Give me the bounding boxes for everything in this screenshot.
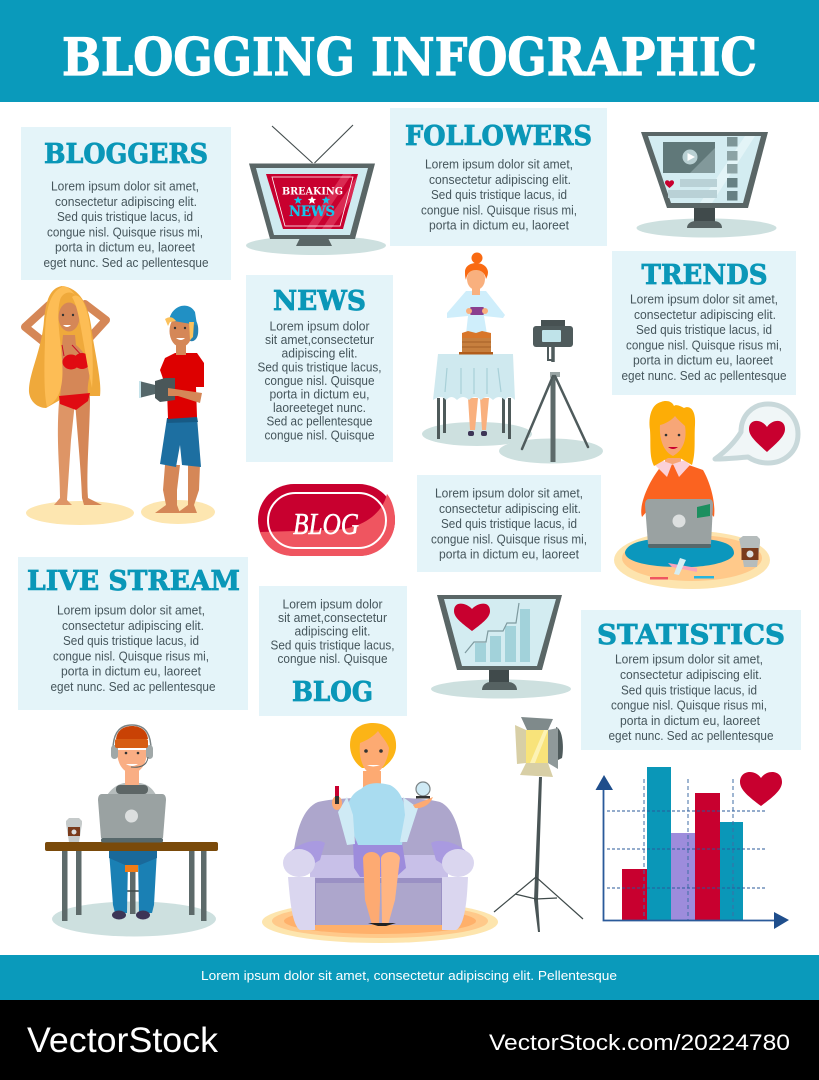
text block: live stream: porta in dictum eu, laoreet	[61, 665, 202, 679]
text block: bloggers: Sed quis tristique lacus, id	[57, 210, 193, 224]
text block: news: Lorem ipsum dolor	[270, 320, 370, 334]
text block: news	[258, 320, 382, 442]
text block: bloggers: eget nunc. Sed ac pellentesque	[44, 256, 209, 270]
icon: video monitor	[636, 132, 776, 238]
heading: blog: BLOG	[292, 676, 373, 708]
panel: news	[246, 275, 393, 462]
text block: trends: Sed quis tristique lacus, id	[636, 323, 772, 337]
heading: followers: FOLLOWERS	[405, 120, 592, 152]
text block: statistics: consectetur adipiscing elit.	[620, 668, 762, 682]
text block: statistics: porta in dictum eu, laoreet	[620, 714, 761, 728]
text block: news: sit amet,consectetur	[265, 333, 374, 347]
text block: blog: Sed quis tristique lacus,	[270, 638, 394, 652]
text block: news: congue nisl. Quisque	[264, 374, 375, 388]
heading: news: NEWS	[273, 285, 366, 317]
text block: news: congue nisl. Quisque	[264, 428, 375, 442]
panel: centre text: Lorem ipsum dolor sit amet,	[435, 486, 583, 500]
footer bar	[0, 955, 819, 1000]
illustration: tripod camera	[499, 320, 603, 464]
footer bar: Lorem ipsum dolor sit amet, consectetur adipiscing elit. Pellentesque	[201, 968, 617, 983]
text block: trends: Lorem ipsum dolor sit amet,	[630, 292, 778, 306]
watermark bar	[0, 1000, 819, 1080]
text block: blog	[270, 598, 394, 666]
title: BLOGGING INFOGRAPHIC	[62, 28, 757, 88]
icon: breaking news tv: BREAKING	[282, 186, 343, 198]
panel: statistics	[581, 610, 801, 750]
panel: centre text: congue nisl. Quisque risus mi,	[431, 532, 587, 546]
text block: live stream: eget nunc. Sed ac pellentesque	[50, 680, 216, 694]
text block: statistics: eget nunc. Sed ac pellentesque	[608, 729, 774, 743]
illustration: studio light	[494, 717, 583, 932]
text block: blog: congue nisl. Quisque	[278, 652, 388, 666]
text block: trends: consectetur adipiscing elit.	[634, 308, 776, 322]
text block: bloggers: congue nisl. Quisque risus mi,	[47, 225, 203, 239]
text block: followers: Sed quis tristique lacus, id	[431, 188, 567, 202]
text block: trends: porta in dictum eu, laoreet	[633, 354, 774, 368]
text block: news: Sed quis tristique lacus,	[258, 360, 382, 374]
panel: centre text: consectetur adipiscing elit.	[439, 502, 581, 516]
panel: followers	[390, 108, 607, 246]
illustration: bikini blogger	[25, 286, 134, 525]
text block: followers: Lorem ipsum dolor sit amet,	[425, 158, 573, 172]
text block: bloggers: Lorem ipsum dolor sit amet,	[51, 180, 199, 194]
panel: bloggers	[21, 127, 231, 280]
panel: centre text: porta in dictum eu, laoreet	[439, 548, 580, 562]
text block: blog: sit amet,consectetur	[278, 611, 387, 625]
watermark bar: VectorStock.com/20224780	[489, 1030, 790, 1055]
text block: trends: eget nunc. Sed ac pellentesque	[622, 369, 787, 383]
watermark bar: VectorStock	[27, 1021, 219, 1060]
text block: followers: porta in dictum eu, laoreet	[429, 219, 570, 233]
text block: followers: congue nisl. Quisque risus mi,	[421, 203, 577, 217]
illustration: photographer	[139, 306, 215, 524]
text block: news: adipiscing elit.	[282, 347, 358, 361]
panel: live stream	[18, 557, 248, 710]
heading: statistics: STATISTICS	[597, 619, 785, 651]
icon: blog button	[258, 484, 395, 556]
text block: statistics: Lorem ipsum dolor sit amet,	[615, 653, 763, 667]
panel: centre text: Sed quis tristique lacus, id	[441, 517, 577, 531]
text block: statistics: congue nisl. Quisque risus mi,	[611, 699, 767, 713]
illustration: cake blogger at table	[422, 252, 532, 446]
text block: blog: Lorem ipsum dolor	[282, 598, 382, 612]
icon: heart speech bubble	[715, 404, 798, 463]
text block: news: laoreeteget nunc.	[273, 401, 366, 415]
text block: live stream	[50, 604, 216, 694]
text block: live stream: Lorem ipsum dolor sit amet,	[57, 604, 205, 618]
icon: breaking news tv: NEWS	[289, 204, 335, 220]
text block: statistics: Sed quis tristique lacus, id	[621, 683, 757, 697]
heading: bloggers: BLOGGERS	[44, 138, 208, 170]
text block: blog: adipiscing elit.	[294, 625, 370, 639]
heading: live stream: LIVE STREAM	[27, 565, 240, 597]
text block: live stream: congue nisl. Quisque risus mi,	[53, 649, 209, 663]
text block: statistics	[608, 653, 774, 743]
heading: trends: TRENDS	[642, 259, 768, 291]
panel: trends	[612, 251, 796, 395]
text block: trends: congue nisl. Quisque risus mi,	[626, 338, 782, 352]
panel: centre text	[417, 475, 601, 572]
icon: blog button: BLOG	[293, 506, 359, 541]
icon: statistics monitor	[431, 595, 571, 698]
text block: live stream: consectetur adipiscing elit.	[62, 619, 204, 633]
illustration: woman on sofa	[262, 723, 498, 943]
text block: bloggers	[44, 180, 209, 270]
illustration: laptop woman on rug	[614, 401, 770, 589]
text block: bloggers: consectetur adipiscing elit.	[55, 195, 197, 209]
text block: followers	[421, 158, 577, 233]
panel: blog	[259, 586, 407, 716]
text block: followers: consectetur adipiscing elit.	[429, 173, 571, 187]
icon: breaking news tv	[246, 125, 386, 255]
bar chart with heart	[596, 767, 789, 929]
text block: news: Sed ac pellentesque	[266, 415, 373, 429]
text block: news: porta in dictum eu,	[270, 388, 370, 402]
illustration: live stream man at desk	[45, 725, 218, 936]
text block: live stream: Sed quis tristique lacus, id	[63, 634, 199, 648]
text block: bloggers: porta in dictum eu, laoreet	[55, 241, 196, 255]
text block: trends	[622, 292, 787, 383]
header banner	[0, 0, 819, 102]
